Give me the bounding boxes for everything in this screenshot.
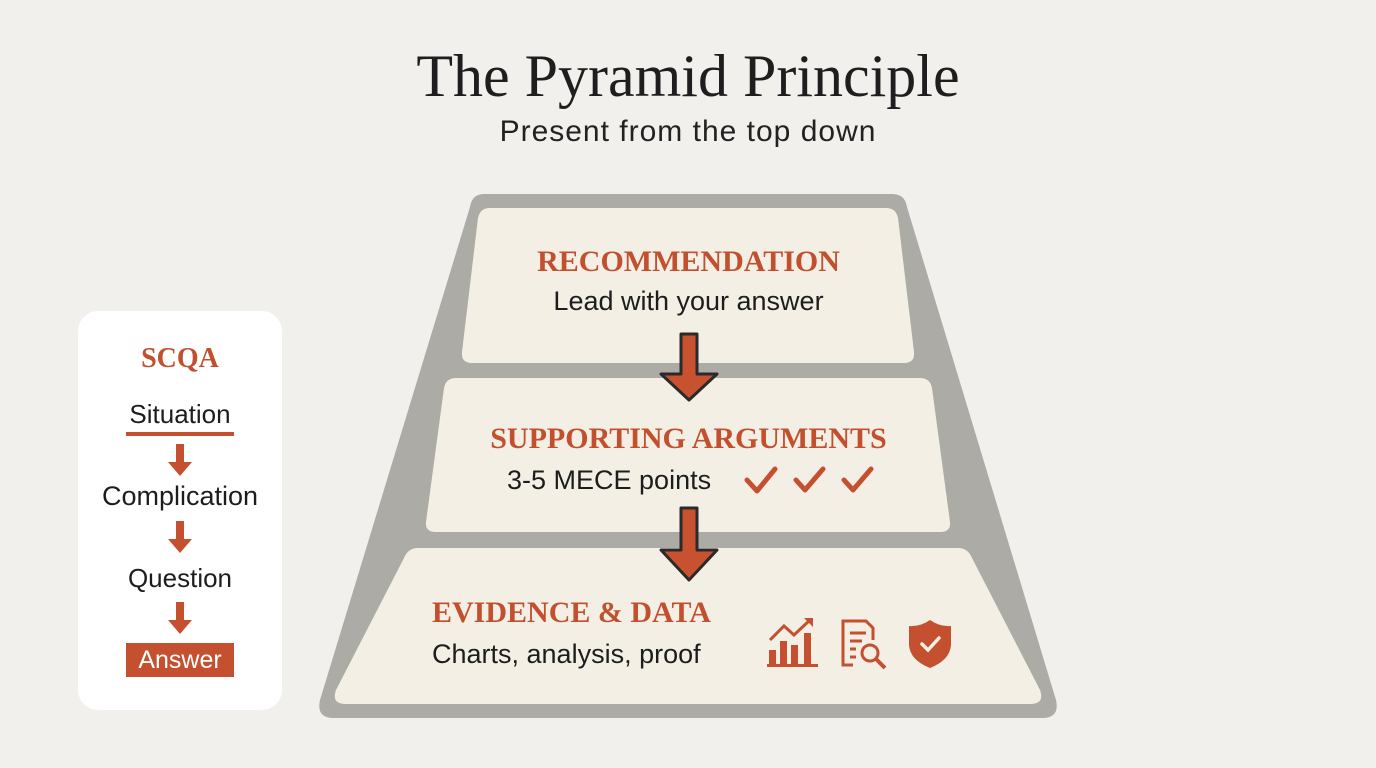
icon: bar chart — [767, 618, 818, 667]
arrow 2 — [661, 508, 717, 580]
tier: evidence — [335, 548, 1041, 704]
arrow 1 — [661, 334, 717, 400]
step: answer — [126, 643, 234, 677]
tier 3 text: EVIDENCE & DATA — [432, 596, 711, 629]
arrow — [168, 521, 192, 553]
checkmarks — [747, 469, 871, 491]
tier 2 heading: SUPPORTING ARGUMENTS — [490, 422, 887, 455]
icon: document search — [843, 621, 885, 668]
step: question: Question — [128, 563, 232, 593]
step: situation: Situation — [129, 399, 231, 429]
SCQA heading: SCQA — [141, 343, 219, 374]
tier 1 text — [537, 245, 840, 316]
tier 1 text: Lead with your answer — [553, 286, 824, 316]
tier 1 text: RECOMMENDATION — [537, 245, 840, 278]
tier: recommendation — [462, 208, 914, 363]
step: answer: Answer — [138, 646, 222, 674]
pyramid outer frame — [319, 194, 1057, 718]
subtitle: Present from the top down — [500, 115, 876, 148]
tier 3 text — [432, 596, 711, 669]
title: The Pyramid Principle — [416, 43, 960, 109]
tier 2 text: 3-5 MECE points — [507, 465, 711, 495]
tier: supporting arguments — [426, 378, 950, 532]
step: complication: Complication — [102, 481, 258, 511]
tier 3 text: Charts, analysis, proof — [432, 639, 701, 669]
arrow — [168, 444, 192, 476]
icon: shield check — [909, 620, 951, 668]
arrow — [168, 602, 192, 634]
panel: SCQA — [78, 311, 282, 710]
